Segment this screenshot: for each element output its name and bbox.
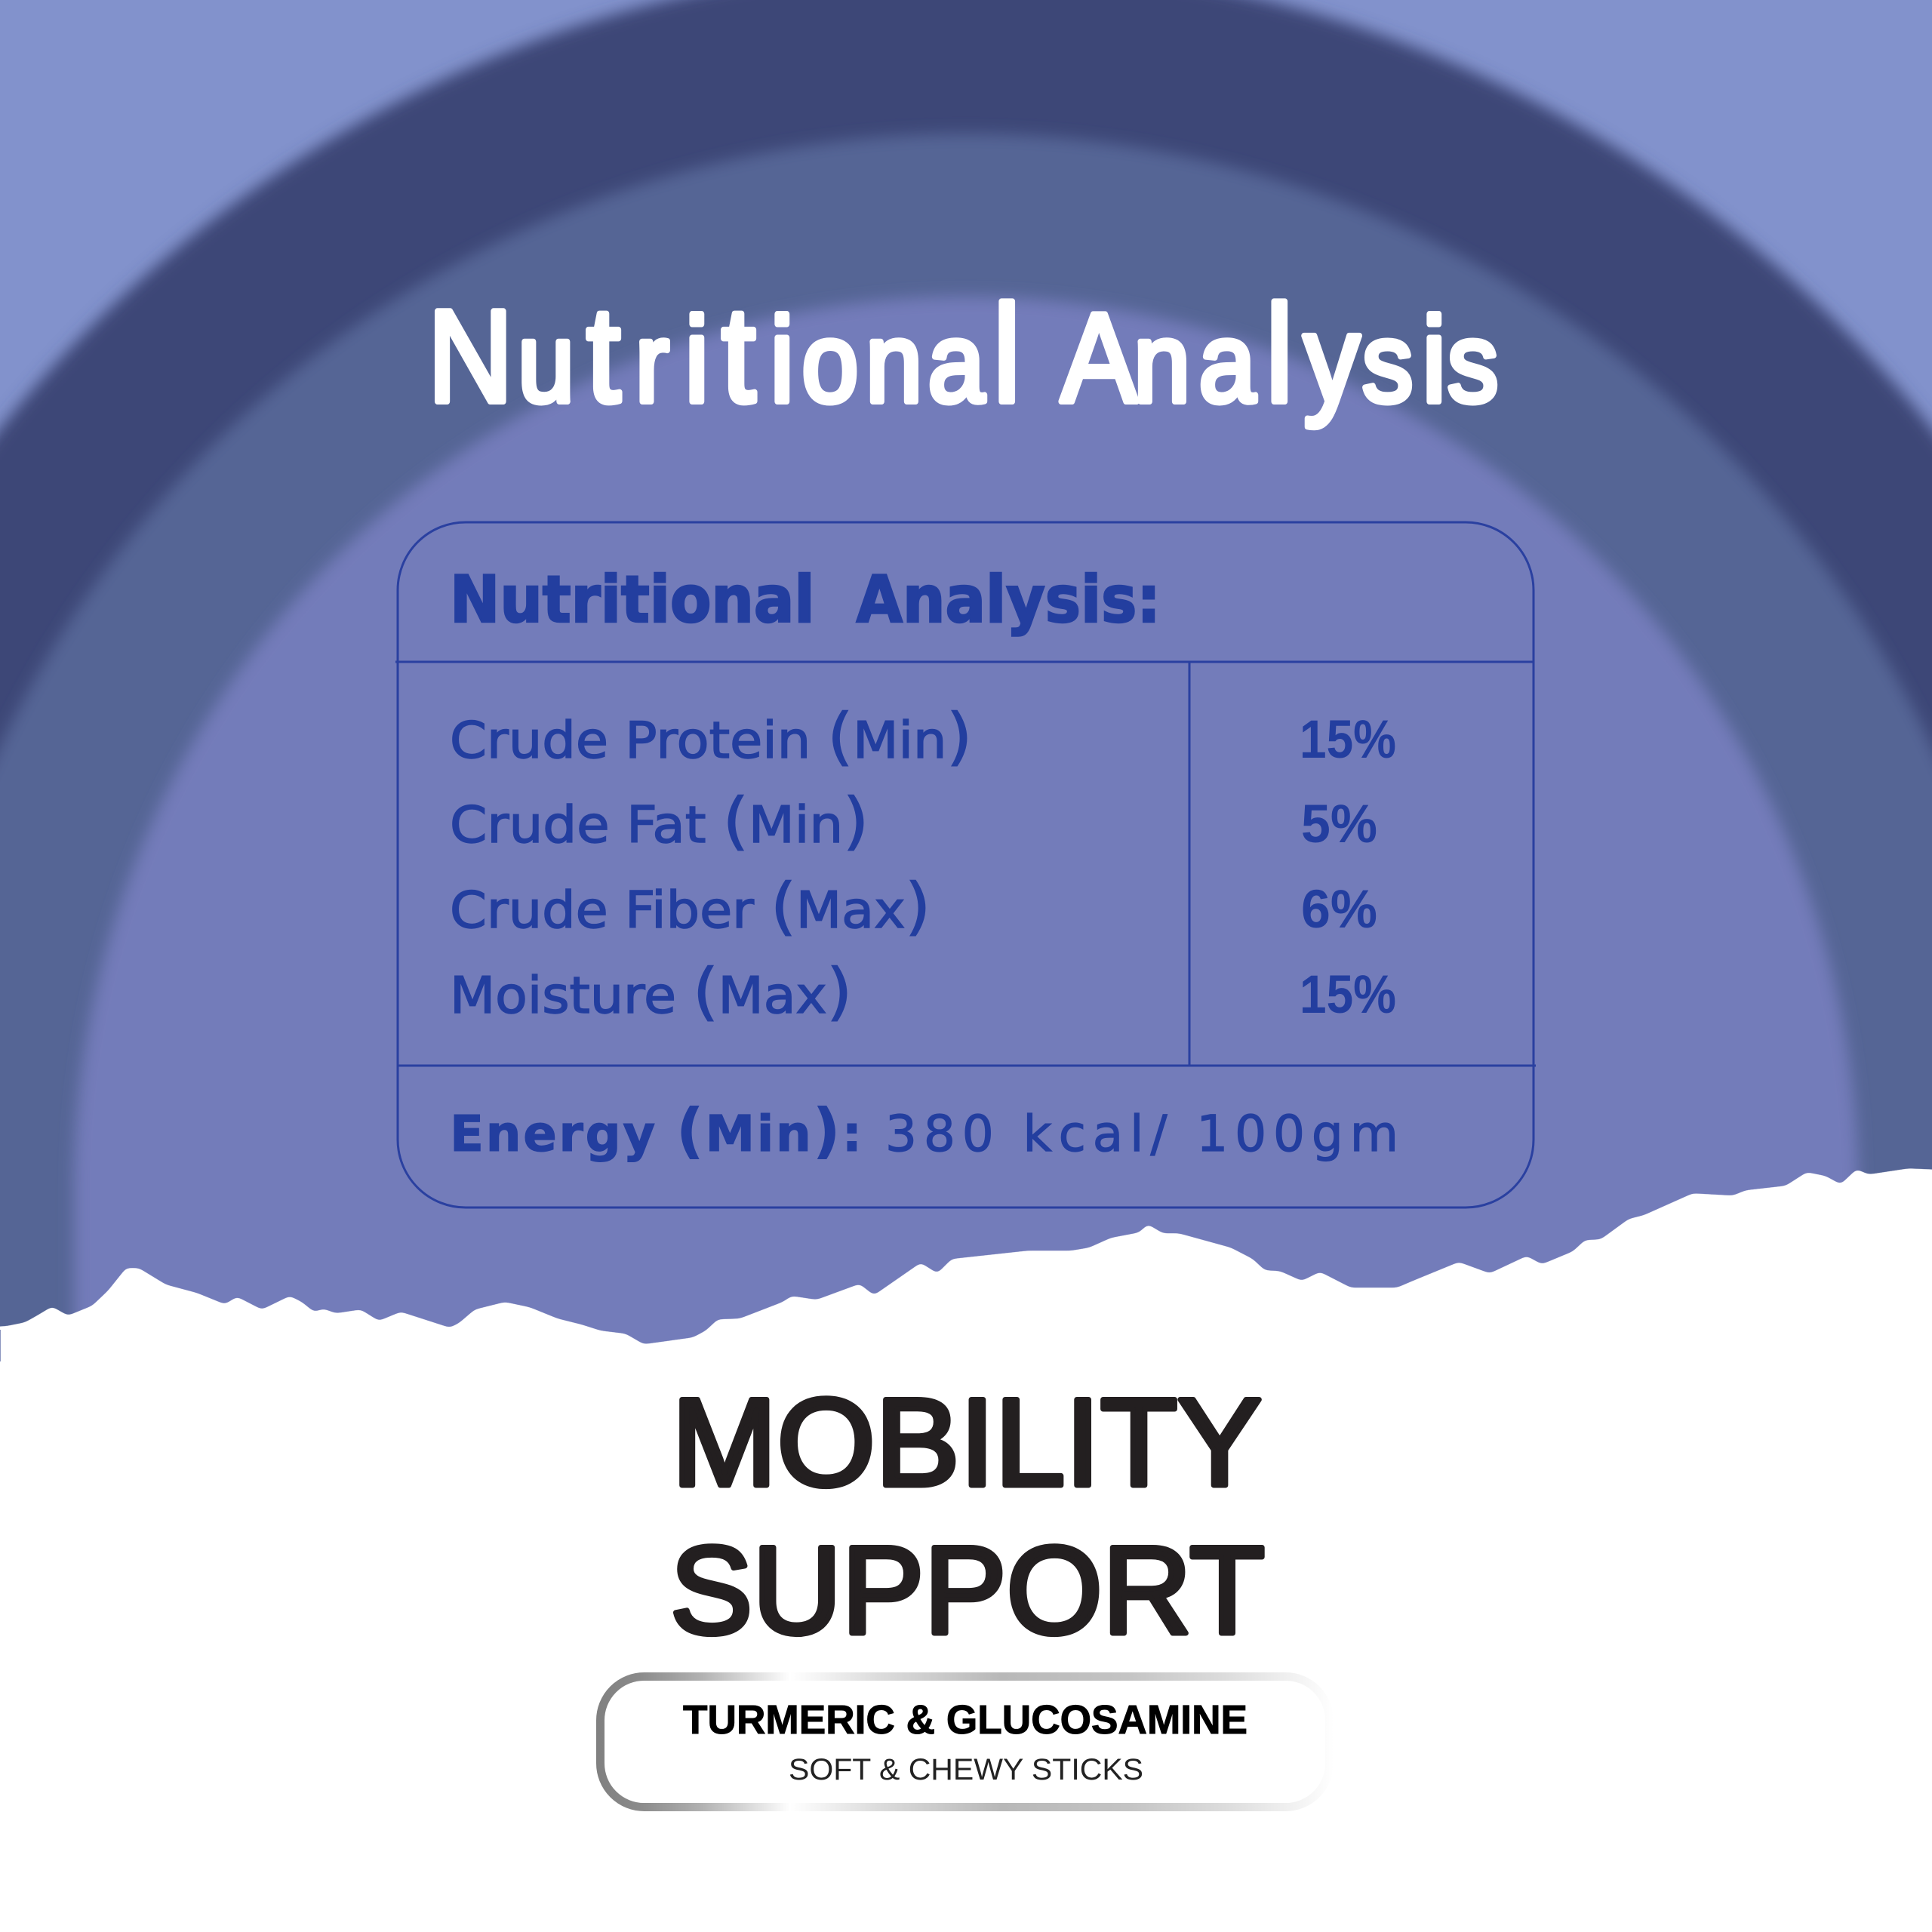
row: crude protein: Crude Protein (Min)	[450, 701, 972, 773]
product headline: MOBILITY	[672, 1373, 1262, 1512]
product headline: SUPPORT	[670, 1521, 1265, 1660]
row: crude protein	[450, 701, 1396, 773]
background: concentric arches	[0, 0, 1932, 1396]
row: moisture	[450, 956, 1396, 1028]
row: crude fat: Crude Fat (Min)	[450, 786, 869, 857]
energy line: Energy (Min):	[450, 1097, 862, 1165]
main title: Analysis	[1061, 276, 1498, 431]
outer dark arch	[0, 0, 1932, 1396]
table dividers	[395, 662, 1536, 1066]
row: crude fiber: Crude Fiber (Max)	[450, 871, 931, 943]
inner arch	[74, 297, 1858, 1396]
row: moisture: 15%	[1300, 965, 1396, 1025]
row: crude fat: 5%	[1301, 795, 1377, 854]
main title	[428, 276, 1498, 431]
badge outline	[601, 1677, 1330, 1807]
energy line	[450, 1097, 1398, 1165]
row: crude fiber: 6%	[1301, 880, 1377, 940]
torn white paper	[0, 1168, 1932, 1932]
table outline	[398, 522, 1534, 1208]
product headline	[670, 1373, 1265, 1660]
panel: nutrition table	[395, 522, 1536, 1208]
table heading: Nutritional Analysis:	[450, 562, 1161, 638]
row: moisture: Moisture (Max)	[450, 956, 852, 1028]
energy line: 380 kcal/ 100gm	[885, 1105, 1398, 1163]
product badge	[601, 1677, 1330, 1807]
row: crude protein: 15%	[1300, 710, 1396, 770]
middle arch	[0, 134, 1932, 1396]
badge title: TURMERIC & GLUCOSAMINE	[683, 1697, 1247, 1743]
main title: Nutritional	[428, 276, 1020, 431]
row: crude fat	[450, 786, 1377, 857]
row: crude fiber	[450, 871, 1377, 943]
badge subtitle: SOFT & CHEWY STICKS	[789, 1753, 1143, 1786]
